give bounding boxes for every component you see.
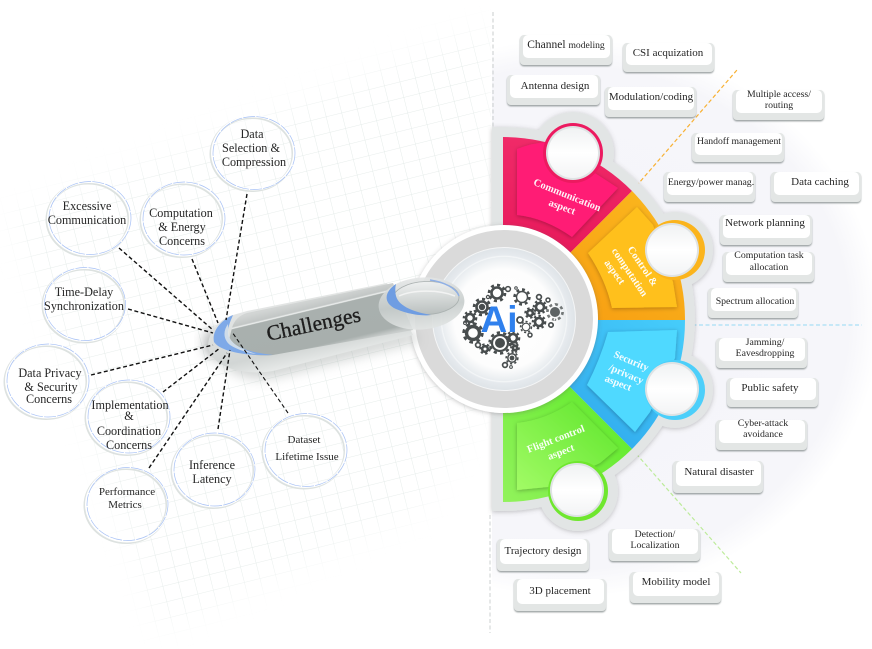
bubble: implementation and coordination concerns: Concerns [106, 438, 152, 452]
label: communication aspect: Communication [532, 177, 602, 214]
tag: detection/localization [609, 529, 700, 561]
icon disc: communication [543, 123, 603, 183]
handle body [229, 283, 413, 355]
tag: antenna design [507, 75, 600, 105]
bubble: data selection and compression: Compression [222, 155, 286, 169]
bubble: inference latency: Inference [189, 458, 235, 472]
bubble: computation and energy concerns: Computation [149, 206, 213, 220]
bubble: data selection and compression: Data [240, 127, 264, 141]
panel: communication aspect [503, 123, 632, 320]
bubble: performance metrics: Performance [99, 486, 155, 498]
background: lilac circle on the right [492, 20, 872, 649]
bubble: data selection and compression [211, 116, 295, 190]
bubble: dataset lifetime issue: Dataset [288, 434, 320, 446]
bubble: dataset lifetime issue: Lifetime Issue [275, 451, 339, 463]
tag: network planning: Network planning [725, 217, 805, 229]
handle glass shell [208, 283, 413, 372]
tag: computation task allocation: Computation task [734, 250, 804, 261]
logo text: Ai: Ai [480, 299, 518, 340]
label: control and computation aspect: aspect [601, 258, 627, 287]
tag: multiple access/routing: routing [765, 100, 793, 111]
segment: security [503, 320, 685, 449]
label: control and computation aspect: computation [609, 246, 649, 299]
bubble: performance metrics [85, 468, 168, 542]
label: control and computation aspect: Control & [625, 245, 660, 289]
tag: 3D placement: 3D placement [529, 585, 591, 597]
tag: detection/localization: Detection/ [635, 529, 676, 540]
tag: handoff management [692, 133, 784, 162]
icon: gear brain [464, 285, 563, 368]
central disc [410, 225, 598, 413]
segment: flight [503, 320, 632, 502]
bubble: implementation and coordination concerns: Implementation [91, 398, 169, 412]
tag: natural disaster [673, 461, 763, 493]
tag: jamming/eavesdropping: Eavesdropping [736, 348, 794, 359]
background: tilted grid on the left [13, 29, 491, 628]
segment: communication [503, 137, 632, 320]
bubble: performance metrics: Metrics [108, 499, 142, 511]
tag: jamming/eavesdropping: Jamming/ [746, 337, 785, 348]
label: security privacy aspect: /privacy [606, 362, 646, 387]
tag: energy/power management [664, 172, 755, 202]
blue crescent [214, 315, 273, 355]
bubble: data selection and compression: Selection & [222, 141, 280, 155]
bubble: excessive communication: Excessive [63, 199, 111, 213]
tag: computation task allocation [723, 250, 814, 282]
tag: spectrum allocation: Spectrum allocation [716, 296, 794, 307]
label: control and computation aspect [601, 245, 660, 299]
tag: 3D placement [514, 579, 606, 611]
blue dashed guide [686, 324, 862, 326]
tag: computation task allocation: allocation [750, 262, 788, 273]
green dashed guide [632, 449, 741, 573]
bubble: data privacy and security concerns: Data Privacy [18, 366, 83, 380]
label: flight control aspect: Flight control [526, 424, 587, 456]
bubble: implementation and coordination concerns: & [124, 409, 134, 423]
bubble: inference latency: Latency [192, 472, 233, 486]
tag: energy/power management: Energy/power manag. [668, 177, 754, 188]
ring [376, 274, 467, 333]
panel: control and computation aspect [503, 191, 705, 320]
challenges handle [204, 274, 467, 378]
bubble: excessive communication [47, 182, 131, 256]
pale crescent highlight [224, 324, 256, 354]
bubble: inference latency [172, 433, 255, 508]
fan: grey halo [492, 112, 713, 531]
bubble: implementation and coordination concerns: Coordination [97, 424, 161, 438]
handle shadow [212, 330, 420, 378]
inner panel: control [588, 207, 677, 308]
tag: network planning [720, 215, 812, 245]
label: flight control aspect: aspect [546, 442, 577, 463]
icon disc: security [645, 360, 705, 420]
dashed vertical divider, bottom [489, 515, 491, 633]
tag: mobility model [630, 572, 721, 603]
bubble: data privacy and security concerns: Concerns [26, 392, 72, 406]
tag: public safety: Public safety [741, 382, 799, 394]
tag: antenna design: Antenna design [521, 80, 590, 92]
connector lines from hub to challenge bubbles [91, 194, 288, 468]
tag: modulation/coding: Modulation/coding [609, 91, 694, 103]
bubble: excessive communication: Communication [48, 213, 126, 227]
tag: channel modeling: Channel modeling [527, 39, 605, 51]
tag: handoff management: Handoff management [697, 136, 781, 147]
panel: flight control aspect [503, 320, 632, 521]
tag: data caching: Data caching [791, 176, 849, 188]
tag: trajectory design: Trajectory design [505, 545, 582, 557]
tag: CSI acquization [623, 43, 714, 72]
panel: security and privacy aspect [503, 320, 705, 449]
bubble: implementation and coordination concerns [86, 380, 170, 454]
tag: modulation/coding [605, 87, 696, 117]
tag: channel modeling [520, 35, 612, 65]
bubble: data privacy and security concerns [5, 344, 89, 418]
dashed vertical divider, top [492, 12, 494, 127]
tag: natural disaster: Natural disaster [684, 466, 754, 478]
bubble: computation and energy concerns: & Energy [158, 220, 207, 234]
hub shadow [204, 329, 224, 357]
label: security privacy aspect: Security [612, 349, 651, 374]
bubble: data privacy and security concerns: & Security [24, 380, 78, 394]
tag: cyber-attack avoidance: Cyber-attack [738, 418, 788, 429]
inner panel: flight [517, 402, 618, 490]
tag: multiple access/routing: Multiple access/ [747, 89, 811, 100]
tag: cyber-attack avoidance [716, 418, 807, 450]
bubble: time-delay synchronization [43, 268, 126, 342]
tag: jamming/eavesdropping [716, 337, 807, 368]
label: security privacy aspect [603, 349, 651, 394]
tag: public safety [727, 378, 818, 407]
tag: detection/localization: Localization [631, 540, 680, 551]
tag: spectrum allocation [708, 288, 798, 318]
inner panel: communication [517, 142, 618, 237]
label: communication aspect: aspect [547, 198, 577, 218]
orange dashed guide [632, 70, 737, 191]
icon disc: control [645, 220, 705, 280]
icon disc: flight [548, 461, 608, 521]
tag: multiple access/routing [733, 89, 824, 120]
bubble: time-delay synchronization: Synchronization [44, 299, 124, 313]
bubble: time-delay synchronization: Time-Delay [55, 285, 114, 299]
segment: control [503, 191, 685, 320]
tag: CSI acquization: CSI acquization [633, 47, 704, 59]
tag: trajectory design [497, 539, 589, 571]
tag: mobility model: Mobility model [642, 576, 710, 588]
tag: cyber-attack avoidance: avoidance [743, 429, 784, 440]
bubble: computation and energy concerns: Concerns [159, 234, 205, 248]
inner panel: security [587, 330, 677, 432]
tag: data caching [771, 172, 861, 202]
bubble: dataset lifetime issue [263, 414, 347, 488]
label: security privacy aspect: aspect [603, 374, 633, 394]
heading: challenges: Challenges [264, 302, 363, 346]
bubble: computation and energy concerns [141, 182, 225, 256]
